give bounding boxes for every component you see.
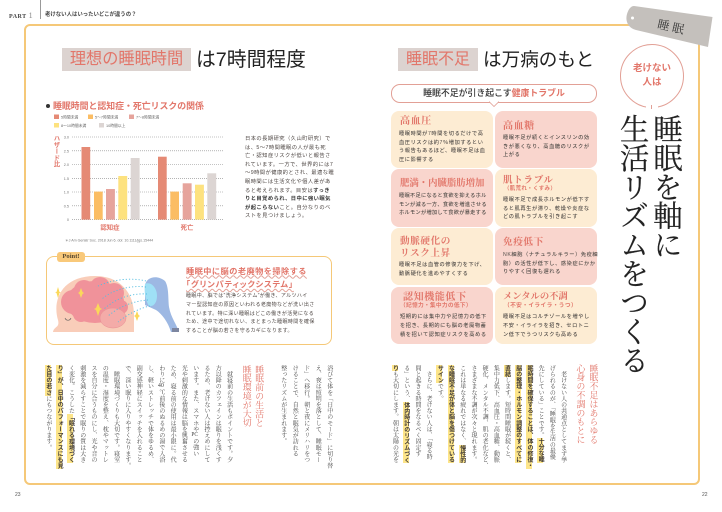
badge text: 老けない <box>633 63 671 74</box>
right article body: 眠時間を確保することは、体の修復・ <box>526 365 532 469</box>
card title: 免疫低下 <box>503 237 544 248</box>
left article body: ため、寝る前の使用は最小限に。代 <box>169 365 175 463</box>
face mark <box>65 318 71 320</box>
badge tick <box>651 105 652 109</box>
card title: 高血糖 <box>503 121 535 132</box>
main vertical title: 生活リズムをつくる <box>616 114 648 374</box>
badge text <box>633 62 671 88</box>
card text: 睡眠不足はコルチゾールを増やし <box>503 314 590 320</box>
card text: 短期的には集中力や記憶力の低下 <box>400 314 487 320</box>
right article body: げられるのが、「睡眠を生活の最優 <box>548 365 554 460</box>
heading highlight: 理想の睡眠時間 <box>70 50 183 68</box>
left article heading: 睡眠環境が大切 <box>242 365 252 427</box>
bar chart with legend <box>52 114 223 242</box>
point body text <box>186 292 315 334</box>
card text: ると肌再生が滞り、乾燥や炎症な <box>503 206 590 212</box>
heading text: は7時間程度 <box>196 49 306 71</box>
left article column continued from right: ド」へ移行。朝と夜にメリハリをつ <box>303 365 309 463</box>
left article body: 睡眠環境づくりも大切です。寝室 <box>113 371 119 463</box>
legend: 10時間以上 <box>106 123 126 128</box>
chart explanation text: が起こらないこと。自分なりのベ <box>245 205 331 211</box>
y axis labels: 2.0 <box>64 163 69 167</box>
main vertical title <box>616 114 682 374</box>
card text: NK細胞（ナチュラルキラー）免疫細 <box>503 252 598 258</box>
card title: 動脈硬化の <box>400 236 451 247</box>
main vertical title: 睡眠を軸に <box>649 114 681 259</box>
chart explanation text: は、5〜7時間睡眠の人が最も死 <box>245 145 326 151</box>
card text: 不安・イライラを招き、セロトニ <box>503 323 589 329</box>
point body text: 睡眠中、脳では“洗浄システム”が働き、アルツハイ <box>186 293 308 299</box>
heading highlight <box>398 48 478 71</box>
heading text: は万病のもと <box>483 49 594 70</box>
illustration: brain being washed by a shower <box>53 276 179 332</box>
category tag <box>626 6 712 47</box>
shower face <box>145 283 157 306</box>
running header <box>9 0 136 20</box>
left article body: 光や刺激的な情報は脳を興奮させる <box>180 365 186 463</box>
speech bubble heading <box>391 84 597 103</box>
part label: PART 1 <box>9 11 33 20</box>
right article body: さまざまな不調が次々と現れます。 <box>470 365 476 463</box>
tag hole <box>631 16 634 20</box>
card text: う報告もあるほど、睡眠不足は血 <box>399 148 486 154</box>
chart explanation text: ストを見つけましょう。 <box>245 213 308 219</box>
page number 23: 23 <box>15 492 21 498</box>
category labels: 死亡 <box>181 222 194 232</box>
right heading <box>398 48 594 71</box>
right article body: 間と起きる時間をなるべく固定す <box>414 365 420 457</box>
right article body: な睡眠不足が体と脳を傷つけている <box>448 365 454 463</box>
card title: 高血圧 <box>400 116 432 127</box>
chart explanation text: 日本の長期研究（久山町研究）で <box>245 136 331 142</box>
right article heading: 睡眠不足はあらゆる <box>588 364 598 444</box>
left article body: わりに 40 ℃前後のぬるめの湯で入浴 <box>158 365 164 463</box>
card text: 睡眠不足が続くとインスリンの効 <box>503 135 590 141</box>
left article body: く変化。こうした 「眠れる環境づく <box>67 365 73 463</box>
card: high blood pressure <box>391 111 493 168</box>
right article body: 直結 します。短時間睡眠が続くと、 <box>504 365 510 463</box>
chart bullet <box>46 104 50 108</box>
point body text: ため、途中で途切れない、まとまった睡眠時間を確保 <box>186 319 315 325</box>
card subtitle: （不安・イライラ・うつ） <box>504 303 577 309</box>
point body text: れています。特に深い睡眠はどこの働きが活発になる <box>186 311 314 317</box>
left article body: し、軽いストレッチで体をゆるめ、 <box>147 365 153 463</box>
point panel <box>46 256 332 345</box>
chart explanation text: れています。一方で、世界的には7 <box>245 162 333 168</box>
y axis labels: 1.5 <box>64 177 69 181</box>
card text <box>503 134 590 158</box>
point body text: することが脳の若さを守るカギになります。 <box>186 328 293 334</box>
gridlines <box>72 137 223 220</box>
chart explanation text: 〜9時間が健康的とされ、最適な睡 <box>245 170 334 176</box>
point badge <box>57 252 85 262</box>
point heading <box>186 266 307 292</box>
chart explanation text: ると考えられます。目安はすっき <box>245 188 330 194</box>
point heading: 「グリンパティックシステム」 <box>186 280 294 289</box>
left article body: 方以降のカフェインは眠りを浅くす <box>214 365 220 463</box>
card: high blood sugar <box>495 111 597 168</box>
circle badge <box>620 44 684 108</box>
brain <box>61 277 128 328</box>
header divider <box>40 0 41 19</box>
chart explanation text: 亡・認知症リスクが低いと報告さ <box>245 153 331 159</box>
right article body: これは単なる疲れではなく、 慢性的 <box>459 365 465 463</box>
card title: リスク上昇 <box>400 248 451 259</box>
left article body: の温度・湿度を整え、枕やマットレ <box>101 365 107 463</box>
right article heading: 心身の不調のもとに <box>576 364 586 444</box>
card: skin trouble <box>495 169 597 227</box>
point body text: マー型認知症の原因といわれる老廃物などが洗い出さ <box>186 302 315 308</box>
right article body: 先にしている」ことです。 十分な睡 <box>537 365 543 463</box>
card title: メンタルの不調 <box>503 292 568 302</box>
head <box>53 276 134 332</box>
sparkles <box>55 287 140 321</box>
right article body: る」という、 体内時計のリズムづく <box>403 365 409 463</box>
left article column continued from right: 整ったリズムが生まれます。 <box>280 365 286 445</box>
card text <box>399 192 487 216</box>
card text: 圧に影響する <box>399 157 434 163</box>
y axis labels: 3.0 <box>64 136 69 140</box>
right article body: さらに、老けない人は、「寝る時 <box>425 371 431 460</box>
card text <box>400 314 487 338</box>
legend <box>54 114 159 128</box>
right article heading <box>576 364 598 444</box>
card text <box>399 130 486 163</box>
right article body: 脳の整理・ホルモン調整のすべてに <box>515 365 521 463</box>
left article body: 就寝前の生活もポイントです。夕 <box>226 371 232 463</box>
card title: 肌トラブル <box>503 175 554 186</box>
card text: ン低下でうつリスクも高める <box>503 332 578 338</box>
card text <box>503 313 590 338</box>
legend: 5時間未満 <box>61 114 79 119</box>
left article body: います。また、スマホや PC の強い <box>191 365 198 457</box>
shower handle end <box>172 328 179 332</box>
y axis labels: 0.5 <box>64 204 69 208</box>
citation: ＊J Am Geriatr Soc. 2018 Jun 6. doi: 10.1111/jgs.15444 <box>65 238 153 242</box>
card text: 胞）の活性が低下し、感染症にかか <box>503 261 596 267</box>
left article body: 刺激を減らすことで眠りの質は大き <box>79 365 85 463</box>
bars: dementia <box>82 147 140 220</box>
card text: 積を招いて認知症リスクを高める <box>400 332 487 338</box>
left article heading: 睡眠前の生活と <box>254 365 264 427</box>
right article body <box>392 365 567 469</box>
card: immunity <box>495 228 597 285</box>
card text: りやすく回復も遅れる <box>503 269 561 275</box>
legend: 8〜10時間未満 <box>61 123 87 128</box>
card: mental health <box>495 287 597 344</box>
card text: 上がる <box>503 152 520 158</box>
card text: 動脈硬化を進めやすくする <box>399 271 468 277</box>
heading highlight: 睡眠不足 <box>406 51 470 68</box>
card text: 睡眠時間が7時間を切るだけで高 <box>399 131 484 137</box>
page number 22: 22 <box>702 492 708 498</box>
card text: 睡眠不足は血管の修復力を下げ、 <box>399 262 485 268</box>
left article column continued from right: けることで、自然と眠気が訪れる <box>291 365 297 457</box>
y axis labels: 0 <box>67 218 69 222</box>
legend: 7〜8時間未満 <box>136 114 159 119</box>
left article body: スを自分に合うものにし、光や音の <box>90 365 96 463</box>
tag label: 睡 眠 <box>656 17 686 37</box>
point badge: Point! <box>62 253 80 260</box>
chart explanation text: 眠時間には生活文化や個人差があ <box>245 179 331 185</box>
left article body <box>45 365 233 469</box>
speech bubble heading: 睡眠不足が引き起こす健康トラブル <box>423 88 565 98</box>
left heading <box>62 48 306 71</box>
y axis labels <box>64 136 69 222</box>
chart explanation text <box>245 136 334 219</box>
card title: 肥満・内臓脂肪増加 <box>400 179 484 189</box>
point heading: 睡眠中に脳の老廃物を掃除する <box>186 266 307 276</box>
card subtitle: （肌荒れ・くすみ） <box>504 186 556 192</box>
right article body: り も大切にします。朝は太陽の光を <box>392 365 398 463</box>
card title: 認知機能低下 <box>403 292 467 303</box>
left article body: で、深い眠りに入りやすくなります。 <box>124 365 130 469</box>
card text: 睡眠不足で成長ホルモンが低下す <box>503 197 590 203</box>
card subtitle: （記憶力・集中力の低下） <box>400 303 472 309</box>
card title <box>400 236 451 259</box>
left article body: るため、老けない人は控えめにして <box>203 365 209 463</box>
right article body: 老けない人の共通点としてまず挙 <box>560 371 566 463</box>
card text <box>399 261 485 277</box>
card: arteriosclerosis <box>391 228 493 285</box>
chart explanation text: りと目覚められ、日中に強い眠気 <box>245 196 331 202</box>
badge bottom gap <box>646 105 658 108</box>
heading highlight <box>62 48 191 71</box>
card text <box>503 196 590 220</box>
left article body: り」が、日中のパフォーマンスにも見 <box>56 365 62 469</box>
card: cognitive decline <box>391 287 493 344</box>
bars: mortality <box>158 157 216 220</box>
left article heading <box>242 365 264 427</box>
category labels <box>100 222 194 232</box>
header text: 老けない人はいったいどこが違うの？ <box>45 12 136 18</box>
card text: ホルモンが増加して食欲が暴走する <box>399 210 487 216</box>
y axis labels: 1.0 <box>64 190 69 194</box>
card text: きが悪くなり、高血糖のリスクが <box>503 144 590 150</box>
card text: どの肌トラブルを引き起こす <box>503 214 578 220</box>
right article body: 硬化、メンタル不調、肌の老化など、 <box>481 365 487 469</box>
badge text: 人は <box>642 77 662 88</box>
bubble pointer <box>489 101 499 107</box>
right article body: 集中力低下、高血圧・高血糖、動脈 <box>492 365 498 463</box>
card: obesity <box>391 169 493 227</box>
left article column continued from right <box>280 365 334 469</box>
left article column continued from right: え、夜は照明を落として、睡眠モー <box>314 365 320 463</box>
card text: を招き、長期的にも脳の老廃物蓄 <box>400 323 486 329</box>
legend: 5〜7時間未満 <box>95 114 118 119</box>
card text: 血圧リスクは約7％増加するとい <box>399 140 484 146</box>
right article body: サイン です。 <box>436 365 442 402</box>
y axis title: ハザード比 <box>52 135 60 167</box>
left article column continued from right: 浴びて体を「日中のモード」に切り替 <box>326 365 332 469</box>
y axis labels: 2.5 <box>64 149 69 153</box>
bar chart section heading: 睡眠時間と認知症・死亡リスクの関係 <box>53 101 204 111</box>
left article body: 副交感神経にスイッチを入れること <box>135 365 141 463</box>
card text <box>503 252 598 275</box>
card text: 睡眠不足になると食欲を抑えるホル <box>399 193 487 199</box>
water streams <box>96 279 150 322</box>
card text: モンが減る一方、食欲を増進させる <box>399 202 487 208</box>
left article body: た目の若さ にもつながります。 <box>45 365 51 451</box>
shower <box>145 277 179 332</box>
category labels: 認知症 <box>100 222 120 232</box>
